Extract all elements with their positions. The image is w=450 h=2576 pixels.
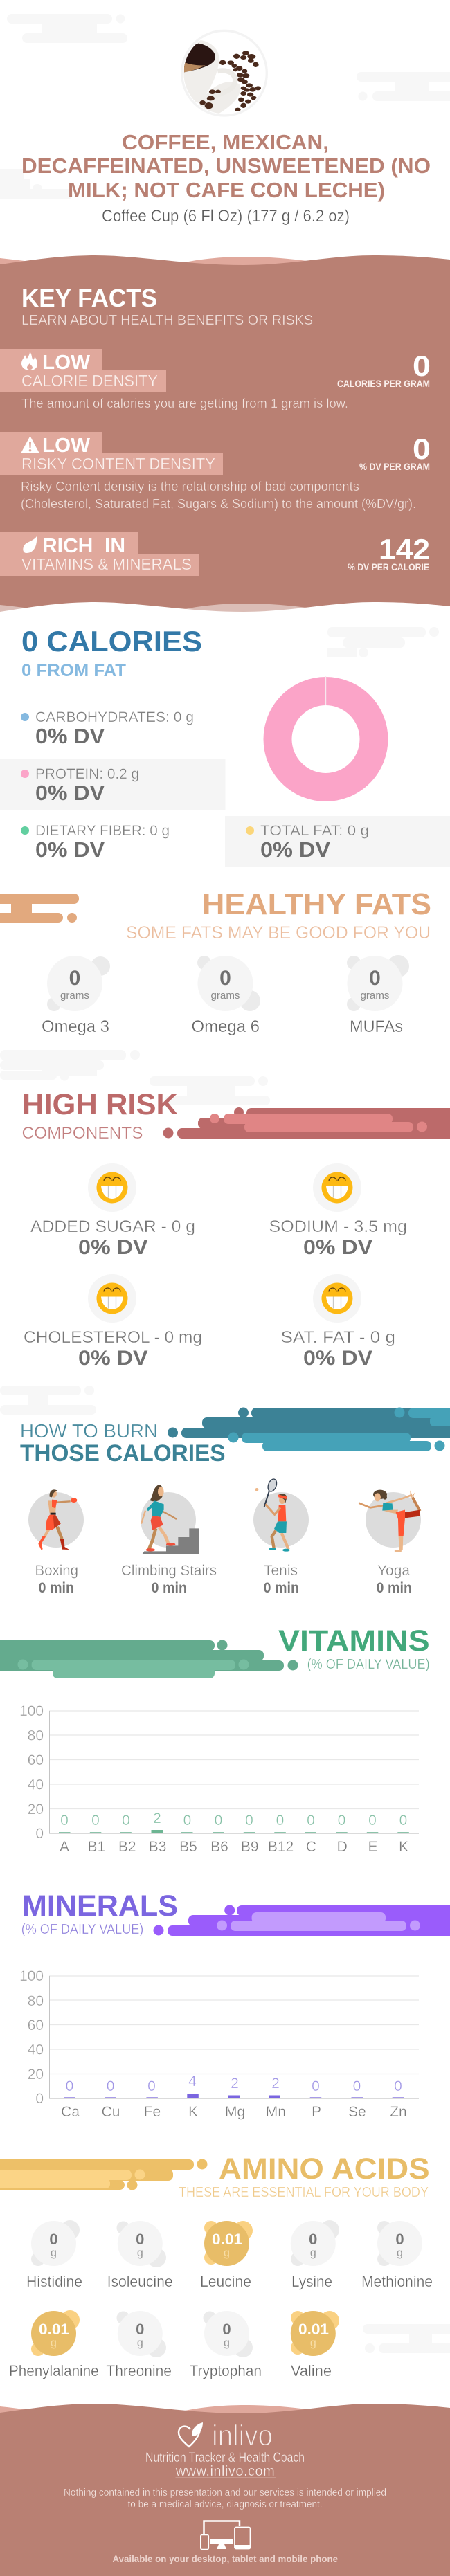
stat: phenylalanine: g <box>51 2337 57 2349</box>
subheading: components: COMPONENTS <box>22 1124 143 1143</box>
macro: carbohydrates: CARBOHYDRATES: 0 g <box>35 709 194 725</box>
panel: amino acids <box>0 2152 433 2379</box>
bar chart: vitamins: 100 <box>19 1703 44 1719</box>
heading: amino acids: AMINO ACIDS <box>219 2152 430 2186</box>
stat: threonine <box>106 2311 172 2379</box>
stat: % DV per gram: 0 <box>413 433 431 465</box>
bar chart: vitamins: B9 <box>241 1839 259 1855</box>
bar chart: minerals: K <box>188 2104 198 2120</box>
bar chart: minerals: 2 <box>271 2076 280 2092</box>
macro: carbohydrates <box>21 709 194 748</box>
stat: methionine: Methionine <box>361 2273 433 2290</box>
bar chart: minerals: Ca <box>61 2104 80 2120</box>
bar chart: vitamins: 0 <box>35 1826 44 1842</box>
icon: grinning face <box>97 1283 127 1314</box>
heading: healthy fats: HEALTHY FATS <box>202 887 431 921</box>
stat: % DV per gram <box>359 433 431 472</box>
bar chart: minerals: 20 <box>28 2067 44 2083</box>
label: boxing: 0 min <box>39 1580 74 1596</box>
stat: methionine: g <box>397 2247 403 2259</box>
logo: inlivo: inlivo <box>212 2419 273 2451</box>
bar chart: vitamins: 0 <box>183 1813 191 1829</box>
bar chart: minerals: Fe <box>144 2104 161 2120</box>
bar chart: vitamins: B6 <box>210 1839 228 1855</box>
banner: vitamins <box>0 1640 298 1678</box>
stat: leucine: 0.01 <box>212 2231 242 2248</box>
stat: methionine <box>361 2221 433 2290</box>
label: yoga <box>377 1563 412 1596</box>
stat: % DV per gram: % DV PER GRAM <box>359 461 430 472</box>
bar chart: vitamins: 0 <box>215 1813 222 1829</box>
callout: rich in vitamins and minerals: VITAMINS & MINERALS <box>21 555 192 573</box>
icon: desktop, tablet and phone <box>201 2521 251 2550</box>
activity: tennis and yoga artwork <box>253 1478 421 1552</box>
panel: minerals <box>19 1889 450 2120</box>
label: boxing: Boxing <box>35 1563 78 1579</box>
macro: dietary fiber: 0% DV <box>35 837 105 862</box>
label: tennis: Tenis <box>264 1563 298 1579</box>
label: climbing stairs: 0 min <box>151 1580 187 1596</box>
callout: risky content density: RISKY CONTENT DENSITY <box>21 455 215 473</box>
stat: added sugar <box>30 1163 195 1259</box>
stat: % DV per calorie: % DV PER CALORIE <box>348 561 429 572</box>
stat: added sugar: 0% DV <box>78 1236 148 1259</box>
bar chart: vitamins: B12 <box>268 1839 294 1855</box>
stat: histidine: 0 <box>49 2231 58 2248</box>
activity: boxing and stairs artwork <box>28 1485 199 1554</box>
callout: calorie density <box>0 349 166 392</box>
banner: high risk <box>163 1107 450 1139</box>
callout: calorie density: LOW <box>42 352 91 374</box>
macro: total fat: TOTAL FAT: 0 g <box>260 823 369 839</box>
stat: MUFAs <box>347 955 409 1036</box>
stat: histidine <box>26 2220 82 2290</box>
stat: omega 3: grams <box>60 990 89 1001</box>
stat: MUFAs: grams <box>360 990 389 1001</box>
macro: total fat: 0% DV <box>260 837 330 862</box>
bar chart: minerals: Se <box>348 2104 366 2120</box>
stat: isoleucine: g <box>137 2247 143 2259</box>
text: calorie density description: The amount of calories you are getting from 1 gram is low. <box>21 397 348 410</box>
panel: how to burn calories <box>20 1408 450 1596</box>
bar chart: minerals: 40 <box>28 2042 44 2058</box>
panel: key facts <box>0 255 450 623</box>
text: tagline: Nutrition Tracker & Health Coach <box>145 2451 305 2465</box>
bar chart: vitamins: B3 <box>149 1839 166 1855</box>
bar chart: minerals: 2 <box>231 2076 239 2092</box>
bar chart: minerals: 0 <box>394 2078 402 2094</box>
text: risky content description: (Cholesterol, Saturated Fat, Sugars & Sodium) to the amount (%DV/gr). <box>21 497 416 511</box>
stat: sodium: SODIUM - 3.5 mg <box>269 1217 407 1236</box>
subheading: key facts: LEARN ABOUT HEALTH BENEFITS OR RISKS <box>21 313 313 328</box>
bar chart: vitamins: B1 <box>87 1839 105 1855</box>
stat: threonine: Threonine <box>106 2362 172 2379</box>
bar chart: vitamins: 2 <box>153 1811 161 1826</box>
stat: omega 6 <box>191 956 260 1036</box>
stat: added sugar: ADDED SUGAR - 0 g <box>30 1217 195 1236</box>
stat: cholesterol: CHOLESTEROL - 0 mg <box>24 1328 202 1347</box>
bar chart: minerals: Zn <box>390 2104 407 2120</box>
bar chart: vitamins: 60 <box>28 1752 44 1768</box>
stat: valine: 0.01 <box>298 2321 329 2338</box>
stat: valine: Valine <box>291 2362 332 2379</box>
stat: lysine: Lysine <box>291 2273 332 2290</box>
heading: high risk: HIGH RISK <box>22 1088 178 1121</box>
text: availability: Available on your desktop, tablet and mobile phone <box>112 2553 338 2564</box>
stat: saturated fat: SAT. FAT - 0 g <box>281 1328 395 1347</box>
panel: healthy fats <box>0 887 431 1036</box>
heading: 0 calories: 0 CALORIES <box>21 625 202 657</box>
bar chart: minerals: 0 <box>147 2078 156 2094</box>
subtitle: serving size: Coffee Cup (6 Fl Oz) (177 g / 6.2 oz) <box>102 207 350 226</box>
macro: protein: PROTEIN: 0.2 g <box>35 766 139 782</box>
icon: warning triangle <box>21 436 39 453</box>
panel: vitamins <box>0 1624 430 1855</box>
bar chart: minerals: P <box>312 2104 321 2120</box>
bar chart: minerals: 0 <box>35 2091 44 2107</box>
link: website: www.inlivo.com <box>175 2464 275 2479</box>
bar chart: minerals: 0 <box>66 2078 73 2094</box>
heading: key facts: KEY FACTS <box>21 284 157 312</box>
bar chart: vitamins: 0 <box>338 1813 345 1829</box>
stat: histidine: g <box>51 2247 57 2259</box>
panel: footer <box>0 2404 450 2576</box>
logo: inlivo <box>179 2419 273 2451</box>
bar chart: minerals: 0 <box>353 2078 361 2094</box>
stat: isoleucine <box>107 2221 173 2290</box>
heading: those calories: THOSE CALORIES <box>20 1440 226 1467</box>
stat: isoleucine: 0 <box>136 2231 144 2248</box>
label: tennis <box>263 1563 299 1596</box>
stat: isoleucine: Isoleucine <box>107 2273 173 2290</box>
stat: phenylalanine <box>9 2310 99 2379</box>
bar chart: vitamins: E <box>368 1839 378 1855</box>
stat: saturated fat: 0% DV <box>303 1347 372 1370</box>
stat: cholesterol <box>24 1274 202 1370</box>
stat: tryptophan: g <box>224 2337 230 2349</box>
banner: healthy fats <box>0 894 79 923</box>
bar chart: vitamins <box>19 1703 419 1855</box>
bar chart: vitamins: 0 <box>122 1813 130 1829</box>
bar chart: vitamins: B5 <box>179 1839 197 1855</box>
subheading: amino acids: THESE ARE ESSENTIAL FOR YOUR BODY <box>179 2185 429 2200</box>
title <box>21 130 431 202</box>
stat: saturated fat <box>281 1274 395 1370</box>
stat: MUFAs: 0 <box>369 967 381 990</box>
bar chart: vitamins: 0 <box>307 1813 315 1829</box>
stat: calories per gram: 0 <box>413 350 431 382</box>
stat: cholesterol: 0% DV <box>78 1347 148 1370</box>
stat: omega 3 <box>42 956 110 1036</box>
stat: omega 3: 0 <box>69 967 80 990</box>
macro: carbohydrates: 0% DV <box>35 724 105 748</box>
title: DECAFFEINATED, UNSWEETENED (NO <box>21 154 431 178</box>
macro: total fat <box>225 816 450 867</box>
text: disclaimer: to be a medical advice, diagnosis or treatment. <box>127 2498 323 2510</box>
callout: calorie density: CALORIE DENSITY <box>21 372 158 390</box>
title: MILK; NOT CAFE CON LECHE) <box>68 178 385 202</box>
banner: amino acids <box>0 2159 208 2190</box>
macro: dietary fiber: DIETARY FIBER: 0 g <box>35 823 170 839</box>
stat: leucine <box>200 2221 253 2290</box>
subheading: healthy fats: SOME FATS MAY BE GOOD FOR YOU <box>126 923 431 943</box>
text: disclaimer <box>64 2487 386 2510</box>
bar chart: minerals: 80 <box>28 1993 44 2009</box>
label: yoga: 0 min <box>377 1580 412 1596</box>
stat: valine <box>291 2311 339 2379</box>
stat: sodium: 0% DV <box>303 1236 372 1259</box>
bar chart: vitamins: D <box>337 1839 348 1855</box>
heading: vitamins: VITAMINS <box>278 1624 430 1658</box>
bar chart: vitamins: 40 <box>28 1777 44 1793</box>
stat: threonine: g <box>137 2337 143 2349</box>
stat: omega 6: grams <box>210 990 240 1001</box>
callout: risky content density: LOW <box>42 435 91 457</box>
label: boxing <box>35 1563 78 1596</box>
stat: calories per gram: CALORIES PER GRAM <box>337 378 430 389</box>
banner: minerals <box>154 1905 450 1936</box>
bar chart: vitamins: 0 <box>245 1813 253 1829</box>
bar chart: minerals: 0 <box>312 2078 320 2094</box>
stat: omega 6: Omega 6 <box>191 1017 260 1036</box>
stat: methionine: 0 <box>395 2231 404 2248</box>
bar chart: vitamins: 0 <box>91 1813 100 1829</box>
icon: grinning face <box>321 1283 353 1314</box>
panel: calories <box>0 625 450 867</box>
callout: risky content density <box>0 432 223 475</box>
bar chart: vitamins: 0 <box>276 1813 284 1829</box>
stat: threonine: 0 <box>136 2321 144 2338</box>
icon: grinning face <box>97 1172 127 1203</box>
banner: burn calories <box>168 1408 450 1451</box>
macro: protein: 0% DV <box>35 781 105 805</box>
bar chart: vitamins: 0 <box>368 1813 377 1829</box>
stat: omega 3: Omega 3 <box>42 1017 109 1036</box>
label: tennis: 0 min <box>263 1580 299 1596</box>
callout: rich in vitamins and minerals <box>0 532 199 576</box>
bar chart: vitamins: B2 <box>118 1839 136 1855</box>
bar chart: vitamins: 80 <box>28 1727 44 1744</box>
image: coffee cup with beans <box>182 30 267 116</box>
stat: phenylalanine: Phenylalanine <box>9 2362 99 2379</box>
macro: dietary fiber <box>21 823 170 862</box>
bar chart: minerals: Mn <box>266 2104 286 2120</box>
text: risky content description <box>21 480 416 511</box>
bar chart: minerals: 60 <box>28 2017 44 2033</box>
bar chart: minerals: 100 <box>19 1968 44 1984</box>
stat: lysine: 0 <box>309 2231 317 2248</box>
stat: omega 6: 0 <box>219 967 231 990</box>
stat: phenylalanine: 0.01 <box>39 2321 69 2338</box>
subheading: minerals: (% OF DAILY VALUE) <box>21 1922 143 1937</box>
stat: % DV per calorie: 142 <box>379 533 430 565</box>
bar chart: minerals: 4 <box>188 2074 197 2089</box>
bar chart: minerals: Cu <box>102 2104 120 2120</box>
label: yoga: Yoga <box>377 1563 410 1579</box>
subheading: 0 from fat: 0 FROM FAT <box>21 661 126 680</box>
bar chart: vitamins: 0 <box>399 1813 407 1829</box>
stat: leucine: g <box>224 2247 230 2259</box>
stat: lysine: g <box>310 2247 316 2259</box>
bar chart: minerals: Mg <box>225 2104 245 2120</box>
text: disclaimer: Nothing contained in this presentation and our services is intended or implied <box>64 2487 386 2498</box>
bar chart: vitamins: 0 <box>60 1813 69 1829</box>
macro: protein <box>0 759 226 810</box>
stat: % DV per calorie <box>348 533 430 572</box>
stat: calories per gram <box>337 350 431 389</box>
stat: sodium <box>269 1163 407 1259</box>
bar chart: minerals <box>19 1968 419 2120</box>
subheading: vitamins: (% OF DAILY VALUE) <box>307 1657 430 1672</box>
text: risky content description: Risky Content density is the relationship of bad components <box>21 480 359 493</box>
title: COFFEE, MEXICAN, <box>122 130 329 154</box>
chart: macronutrient donut <box>278 676 374 788</box>
heading: how to burn: HOW TO BURN <box>20 1420 158 1442</box>
label: climbing stairs <box>121 1563 217 1596</box>
icon: leaf <box>23 536 37 553</box>
stat: tryptophan <box>190 2311 262 2379</box>
callout: rich in vitamins and minerals: RICH IN <box>42 535 125 557</box>
icon: grinning face <box>321 1172 353 1203</box>
bar chart: minerals: 0 <box>107 2078 114 2094</box>
stat: tryptophan: Tryptophan <box>190 2362 262 2379</box>
stat: MUFAs: MUFAs <box>350 1017 403 1036</box>
heading: minerals: MINERALS <box>22 1889 178 1923</box>
bar chart: vitamins: 20 <box>28 1802 44 1817</box>
bar chart: vitamins: A <box>60 1839 69 1855</box>
stat: valine: g <box>310 2337 316 2349</box>
icon: flame <box>21 352 37 370</box>
label: climbing stairs: Climbing Stairs <box>121 1563 217 1579</box>
stat: histidine: Histidine <box>26 2273 82 2290</box>
stat: leucine: Leucine <box>200 2273 251 2290</box>
bar chart: vitamins: C <box>306 1839 316 1855</box>
panel: high risk components <box>22 1088 450 1370</box>
stat: lysine <box>291 2220 339 2290</box>
bar chart: vitamins: K <box>399 1839 408 1855</box>
stat: tryptophan: 0 <box>222 2321 231 2338</box>
